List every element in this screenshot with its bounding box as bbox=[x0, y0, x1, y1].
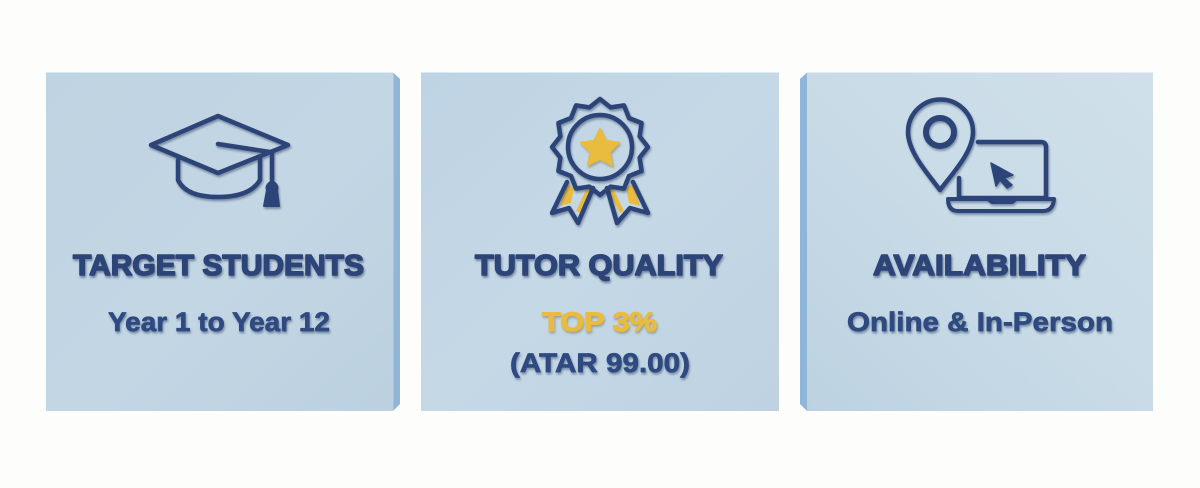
icon: graduation cap bbox=[151, 116, 288, 206]
inner circle bbox=[568, 115, 632, 179]
panel: tutor quality bbox=[421, 72, 779, 411]
panel face bbox=[807, 72, 1153, 411]
ribbon outlines bbox=[552, 182, 648, 223]
heading: availability: AVAILABILITY bbox=[873, 250, 1086, 282]
panel side edge bbox=[800, 72, 807, 411]
text: atar score: (ATAR 99.00) bbox=[510, 348, 690, 378]
star bbox=[581, 129, 619, 165]
panel: target students bbox=[46, 72, 400, 411]
text: top 3%: TOP 3% bbox=[542, 307, 657, 337]
panel: availability bbox=[800, 72, 1153, 411]
heading: target students: TARGET STUDENTS bbox=[73, 250, 364, 282]
text: year range: Year 1 to Year 12 bbox=[108, 307, 330, 337]
icon: location pin and laptop bbox=[908, 100, 1054, 211]
panel face bbox=[46, 72, 394, 411]
heading: tutor quality: TUTOR QUALITY bbox=[475, 250, 723, 282]
text: online and in-person: Online & In-Person bbox=[847, 307, 1113, 337]
panel side edge bbox=[393, 72, 400, 411]
ribbon yellow fills bbox=[560, 184, 640, 213]
panel face bbox=[421, 72, 779, 411]
scalloped badge bbox=[552, 99, 648, 195]
icon: award rosette bbox=[552, 99, 648, 223]
